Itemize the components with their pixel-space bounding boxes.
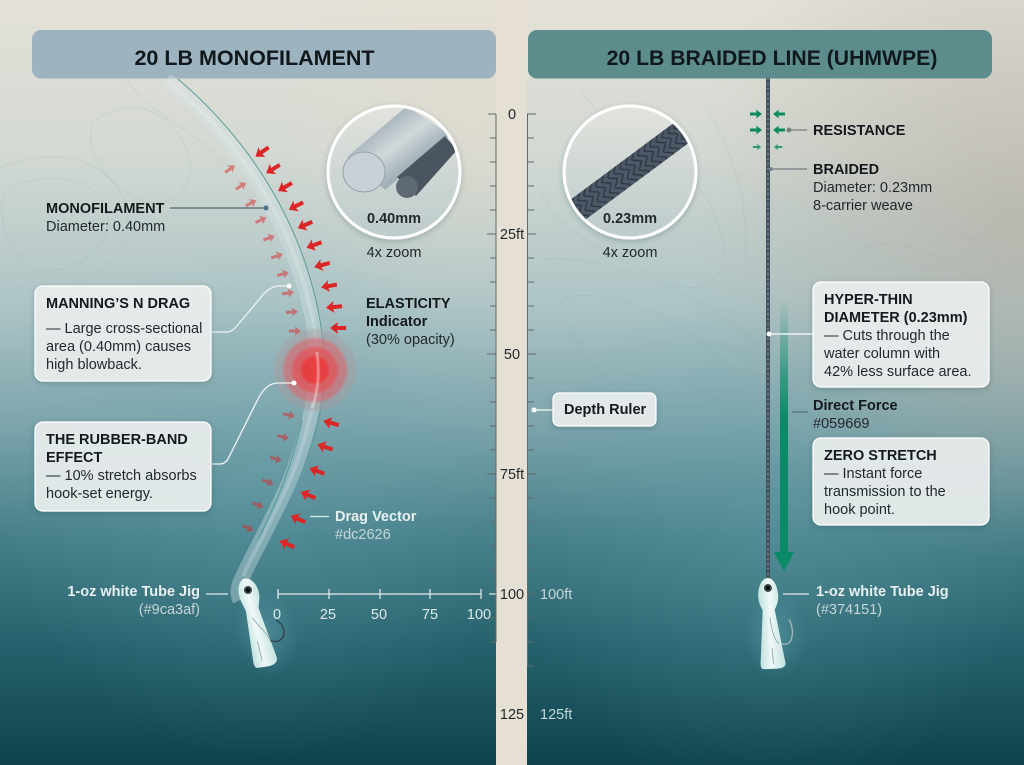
label: monofilament xyxy=(46,201,268,235)
icon: left tube jig xyxy=(222,569,308,683)
callout: zero stretch: ZERO STRETCH xyxy=(824,448,937,464)
monofilament line xyxy=(166,79,324,600)
callout: hyper-thin diameter xyxy=(766,282,989,387)
depth ruler: 50 xyxy=(504,347,520,363)
depth ruler: 0 xyxy=(508,107,516,123)
label: braided: BRAIDED xyxy=(813,162,879,178)
label: direct force xyxy=(792,398,898,432)
callout: hyper-thin diameter: — Cuts through the xyxy=(824,328,950,344)
depth ruler: 25ft xyxy=(500,227,524,243)
label: right tube jig xyxy=(783,584,949,618)
callout: hyper-thin diameter: water column with xyxy=(823,346,940,362)
label: elasticity indicator: (30% opacity) xyxy=(366,332,455,348)
callout: rubber-band effect xyxy=(35,380,296,511)
label: 4x zoom left: 4x zoom xyxy=(367,245,421,261)
magnifier: braided line: 0.23mm xyxy=(603,211,657,227)
heading: 20 LB monofilament xyxy=(32,30,496,78)
callout: hyper-thin diameter: HYPER-THIN xyxy=(824,292,913,308)
drag vector arrows, right side xyxy=(252,142,346,553)
label: elasticity indicator xyxy=(366,296,455,348)
label: braided: 8-carrier weave xyxy=(813,198,913,214)
label: monofilament: MONOFILAMENT xyxy=(46,201,165,217)
callout: Manning's N drag: — Large cross-sectional xyxy=(46,321,202,337)
elasticity arrows, left side xyxy=(223,162,301,535)
depth ruler: 100 xyxy=(500,587,524,603)
heading: 20 LB braided line xyxy=(528,30,992,78)
label: right tube jig: 1-oz white Tube Jig xyxy=(816,584,949,600)
glow: elasticity stress point xyxy=(274,329,356,411)
label: drag vector xyxy=(310,509,417,543)
callout: rubber-band effect: EFFECT xyxy=(46,450,103,466)
callout: depth ruler xyxy=(532,393,656,426)
label: left tube jig xyxy=(67,584,228,618)
depth ruler: 100ft xyxy=(540,587,572,603)
label: braided xyxy=(769,162,932,214)
callout: Manning's N drag xyxy=(35,284,292,381)
label: right tube jig: (#374151) xyxy=(816,602,882,618)
heading: 20 LB monofilament: 20 LB MONOFILAMENT xyxy=(134,46,375,70)
callout: Manning's N drag: area (0.40mm) causes xyxy=(46,339,191,355)
horizontal drag scale: 50 xyxy=(371,607,387,623)
heading: 20 LB braided line: 20 LB BRAIDED LINE (UHMWPE) xyxy=(607,47,937,70)
depth ruler: 125 xyxy=(500,707,524,723)
callout: rubber-band effect: THE RUBBER-BAND xyxy=(46,432,188,448)
callout: rubber-band effect: hook-set energy. xyxy=(46,486,153,502)
callout: Manning's N drag: MANNING’S N DRAG xyxy=(46,296,190,312)
horizontal drag scale: 75 xyxy=(422,607,438,623)
topographic contours xyxy=(0,70,1010,408)
horizontal drag scale: 25 xyxy=(320,607,336,623)
label: left tube jig: 1-oz white Tube Jig xyxy=(67,584,200,600)
direct force arrow xyxy=(774,300,794,571)
depth ruler: 125ft xyxy=(540,707,572,723)
label: drag vector: Drag Vector xyxy=(335,509,417,525)
label: left tube jig: (#9ca3af) xyxy=(139,602,200,618)
magnifier: braided line xyxy=(560,106,700,238)
label: drag vector: #dc2626 xyxy=(335,527,391,543)
resistance arrows xyxy=(750,110,785,150)
label: direct force: Direct Force xyxy=(813,398,898,414)
label: resistance: RESISTANCE xyxy=(813,123,906,139)
callout: Manning's N drag: high blowback. xyxy=(46,357,142,373)
depth ruler: 75ft xyxy=(500,467,524,483)
magnifier: monofilament vs braid diameter xyxy=(328,106,460,238)
label: 4x zoom right: 4x zoom xyxy=(603,245,657,261)
callout: hyper-thin diameter: DIAMETER (0.23mm) xyxy=(824,310,968,326)
callout: zero stretch: — Instant force xyxy=(824,466,922,482)
horizontal drag scale xyxy=(273,589,496,623)
magnifier: monofilament vs braid diameter: 0.40mm xyxy=(367,211,421,227)
label: braided: Diameter: 0.23mm xyxy=(813,180,932,196)
callout: rubber-band effect: — 10% stretch absorbs xyxy=(46,468,197,484)
callout: zero stretch: hook point. xyxy=(824,502,895,518)
icon: right tube jig xyxy=(742,577,809,681)
label: elasticity indicator: ELASTICITY xyxy=(366,296,451,312)
label: direct force: #059669 xyxy=(813,416,869,432)
callout: zero stretch: transmission to the xyxy=(824,484,946,500)
horizontal drag scale: 100 xyxy=(467,607,491,623)
callout: depth ruler: Depth Ruler xyxy=(564,402,647,418)
label: monofilament: Diameter: 0.40mm xyxy=(46,219,165,235)
horizontal drag scale: 0 xyxy=(273,607,281,623)
callout: zero stretch xyxy=(813,438,989,525)
callout: hyper-thin diameter: 42% less surface area. xyxy=(824,364,972,380)
braided line xyxy=(766,78,770,581)
depth ruler xyxy=(487,107,572,723)
label: elasticity indicator: Indicator xyxy=(366,314,428,330)
